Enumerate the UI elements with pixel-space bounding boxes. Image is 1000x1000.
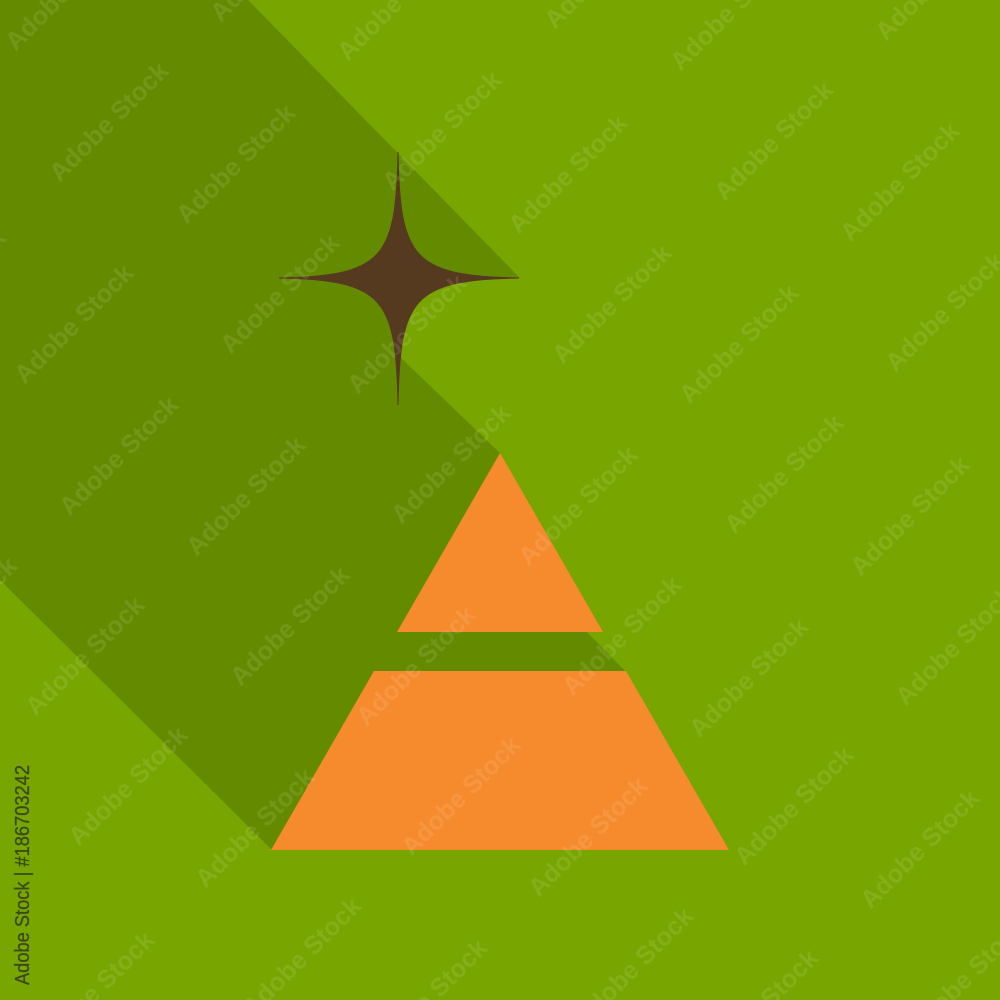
stock watermarks: Adobe Stock bbox=[171, 99, 302, 229]
pyramid bottom segment bbox=[271, 671, 729, 850]
stock watermarks: Adobe Stock bbox=[351, 601, 482, 731]
stock watermarks: Adobe Stock bbox=[523, 772, 654, 902]
stock watermarks: Adobe Stock bbox=[845, 451, 976, 581]
stock watermarks: Adobe Stock bbox=[190, 763, 321, 893]
stock watermarks: Adobe Stock bbox=[20, 591, 151, 721]
vertical stock id text: Adobe Stock | #186703242 bbox=[12, 765, 34, 985]
stock watermarks: Adobe Stock bbox=[377, 66, 508, 196]
stock watermarks: Adobe Stock bbox=[342, 269, 473, 399]
stock watermarks: Adobe Stock bbox=[9, 259, 140, 389]
icon: four-pointed star bbox=[279, 152, 519, 405]
stock watermarks: Adobe Stock bbox=[674, 279, 805, 409]
stock watermarks: Adobe Stock bbox=[855, 784, 986, 914]
stock watermarks: Adobe Stock bbox=[513, 441, 644, 571]
pyramid top segment bbox=[397, 453, 603, 632]
stock watermarks: Adobe Stock bbox=[54, 391, 185, 521]
stock watermarks: Adobe Stock bbox=[503, 109, 634, 239]
long shadow bbox=[0, 0, 625, 850]
stock watermarks: Adobe Stock bbox=[215, 229, 346, 359]
stock watermarks: Adobe Stock bbox=[225, 561, 356, 691]
stock watermarks: Adobe Stock bbox=[709, 76, 840, 206]
stock watermarks: Adobe Stock bbox=[63, 721, 194, 851]
stock watermarks: Adobe Stock bbox=[386, 399, 517, 529]
stock watermarks: Adobe Stock bbox=[729, 741, 860, 871]
stock watermarks: Adobe Stock bbox=[396, 731, 527, 861]
stock watermarks: Adobe Stock bbox=[684, 613, 815, 743]
pyramid bbox=[271, 453, 729, 850]
stock watermarks: Adobe Stock bbox=[181, 431, 312, 561]
stock watermarks: Adobe Stock bbox=[557, 571, 688, 701]
stock watermarks: Adobe Stock bbox=[719, 409, 850, 539]
stock watermarks: Adobe Stock bbox=[835, 117, 966, 247]
stock watermarks: Adobe Stock bbox=[44, 57, 175, 187]
stock watermarks: Adobe Stock bbox=[547, 239, 678, 369]
